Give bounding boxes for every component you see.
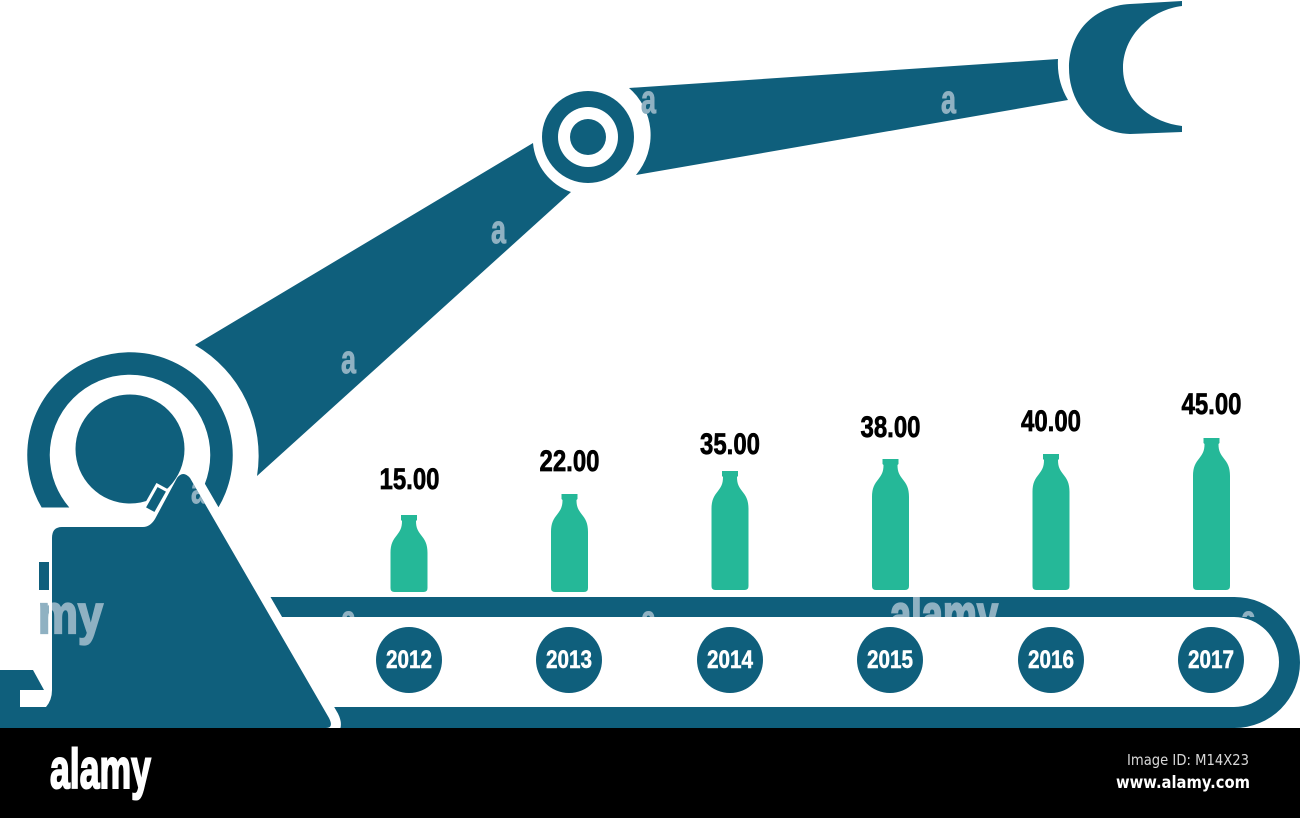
watermarks: my [38, 583, 103, 645]
watermarks: a [641, 598, 657, 642]
watermarks: a [491, 208, 507, 252]
footer bar [0, 728, 1300, 818]
year badge 2012: 2012 [386, 646, 432, 674]
bottle 2012 [390, 515, 428, 592]
base joint ring [38, 364, 222, 546]
bottle 2016 [1032, 454, 1070, 590]
value labels: 38.00 [860, 411, 920, 444]
small hinge block [144, 485, 168, 514]
watermarks: a [1241, 598, 1257, 642]
year badge 2016 [1018, 627, 1084, 693]
year badge 2015: 2015 [867, 646, 913, 674]
footer bar: alamy [50, 737, 151, 800]
watermarks: a [941, 78, 957, 122]
year badge 2013: 2013 [546, 646, 592, 674]
value labels: 45.00 [1182, 388, 1242, 421]
gripper claw [1069, 1, 1182, 134]
value labels: 35.00 [700, 428, 760, 461]
value labels [380, 388, 1242, 496]
upper arm segment [629, 59, 1068, 175]
year badge 2014: 2014 [707, 646, 753, 674]
bottle 2013 [551, 494, 588, 592]
bottle 2017 [1193, 438, 1230, 590]
value labels: 15.00 [380, 463, 440, 496]
watermarks: a [191, 468, 207, 512]
machine base body [46, 394, 331, 728]
year badge 2017 [1178, 627, 1244, 693]
year badge 2015 [857, 627, 923, 693]
footer bar: Image ID: M14X23 [1127, 751, 1249, 769]
bottle 2015 [872, 459, 909, 590]
elbow joint [542, 91, 634, 183]
watermarks: a [341, 338, 357, 382]
year badge 2014 [697, 627, 763, 693]
footer bar: www.alamy.com [1116, 773, 1250, 793]
watermarks [38, 78, 1257, 645]
year badge 2013 [536, 627, 602, 693]
year badge 2016: 2016 [1028, 646, 1074, 674]
watermarks: a [641, 78, 657, 122]
value labels: 22.00 [540, 445, 600, 478]
year badge 2012 [376, 627, 442, 693]
watermarks: a [341, 598, 357, 642]
conveyor belt [240, 597, 1300, 728]
side tab [39, 562, 49, 590]
value labels: 40.00 [1021, 405, 1081, 438]
base foot [0, 670, 60, 728]
watermarks: alamy [890, 583, 998, 645]
lower arm segment [195, 143, 571, 476]
year badge 2017: 2017 [1188, 646, 1234, 674]
bottle 2014 [712, 471, 748, 590]
